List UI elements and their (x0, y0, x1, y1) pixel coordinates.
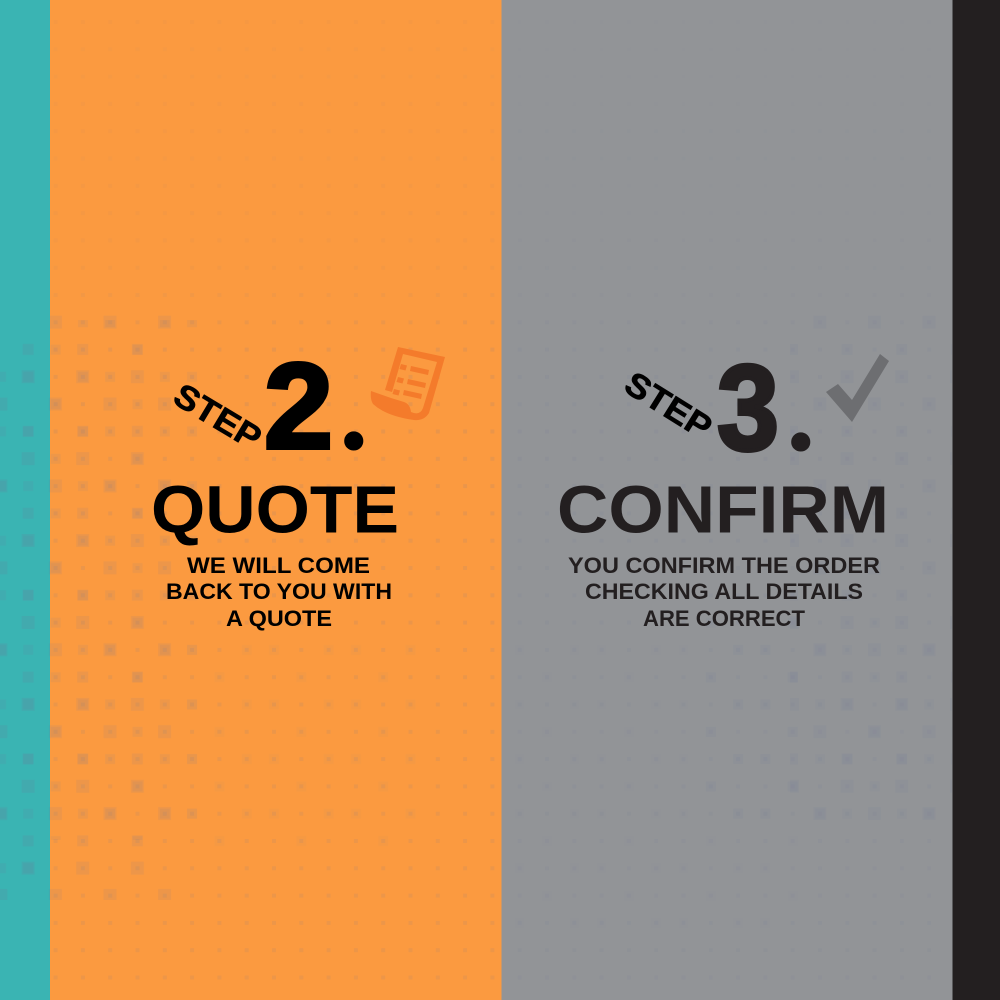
step 2 numeral: 2 (264, 338, 333, 474)
icon: receipt (371, 347, 445, 420)
step 3 description (568, 553, 880, 631)
panel: teal strip (0, 0, 50, 1000)
step 3 numeral: 3 (717, 340, 779, 476)
step 3 content (557, 340, 889, 631)
step 3 description: ARE CORRECT (643, 606, 806, 631)
step 2 description: A QUOTE (226, 606, 332, 631)
step 3 heading: CONFIRM (557, 472, 889, 548)
step 2 period: . (339, 344, 368, 475)
step 2 heading: QUOTE (151, 472, 399, 548)
step 3 description: YOU CONFIRM THE ORDER (568, 553, 880, 578)
step 3 period: . (786, 345, 816, 476)
panel: orange step 2 background (50, 0, 502, 1000)
icon: check mark (826, 354, 889, 422)
step 2 description: WE WILL COME (187, 553, 370, 578)
step 3 description: CHECKING ALL DETAILS (585, 579, 863, 604)
panel: black strip (952, 0, 1000, 1000)
step 2 label: STEP (167, 376, 268, 458)
panel: grey step 3 background (502, 0, 952, 1000)
step 3 label: STEP (618, 365, 718, 447)
step 2 content (151, 338, 445, 631)
step 2 description (166, 553, 392, 631)
step 2 description: BACK TO YOU WITH (166, 579, 392, 604)
